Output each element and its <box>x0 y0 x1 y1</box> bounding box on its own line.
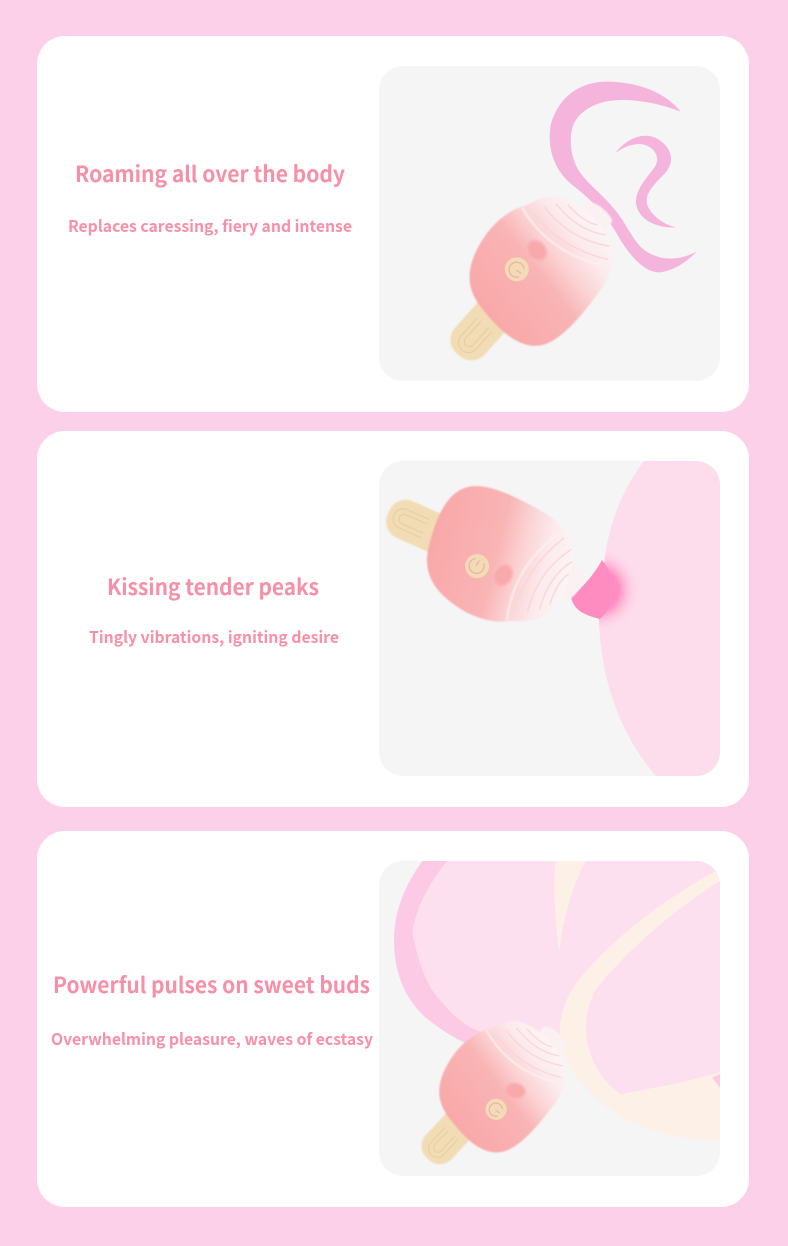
panel: roaming all over the body <box>37 36 749 412</box>
heading: kissing: Kissing tender peaks <box>107 570 319 602</box>
pink glow <box>599 556 633 625</box>
pink rounded shape <box>599 461 720 776</box>
text: replaces caressing: Replaces caressing, fiery and intense <box>68 213 352 237</box>
heading: powerful pulses: Powerful pulses on sweet buds <box>53 968 370 1000</box>
icon: popsicle device <box>420 1021 565 1165</box>
pastel shapes <box>394 856 722 1141</box>
panel: kissing tender peaks <box>37 431 749 807</box>
text: overwhelming pleasure: Overwhelming pleasure, waves of ecstasy <box>51 1026 373 1050</box>
image panel: device with pink shape <box>379 461 720 776</box>
heading: roaming: Roaming all over the body <box>75 157 345 189</box>
text: tingly vibrations: Tingly vibrations, igniting desire <box>89 624 339 648</box>
pink tip <box>571 560 612 619</box>
image panel: device with swirls <box>379 66 720 403</box>
icon: popsicle device <box>420 162 639 403</box>
icon: popsicle device <box>386 485 580 622</box>
icon: pink swirls <box>550 82 697 272</box>
panel: powerful pulses <box>37 831 749 1207</box>
image panel: device with pastel shapes <box>379 856 722 1202</box>
